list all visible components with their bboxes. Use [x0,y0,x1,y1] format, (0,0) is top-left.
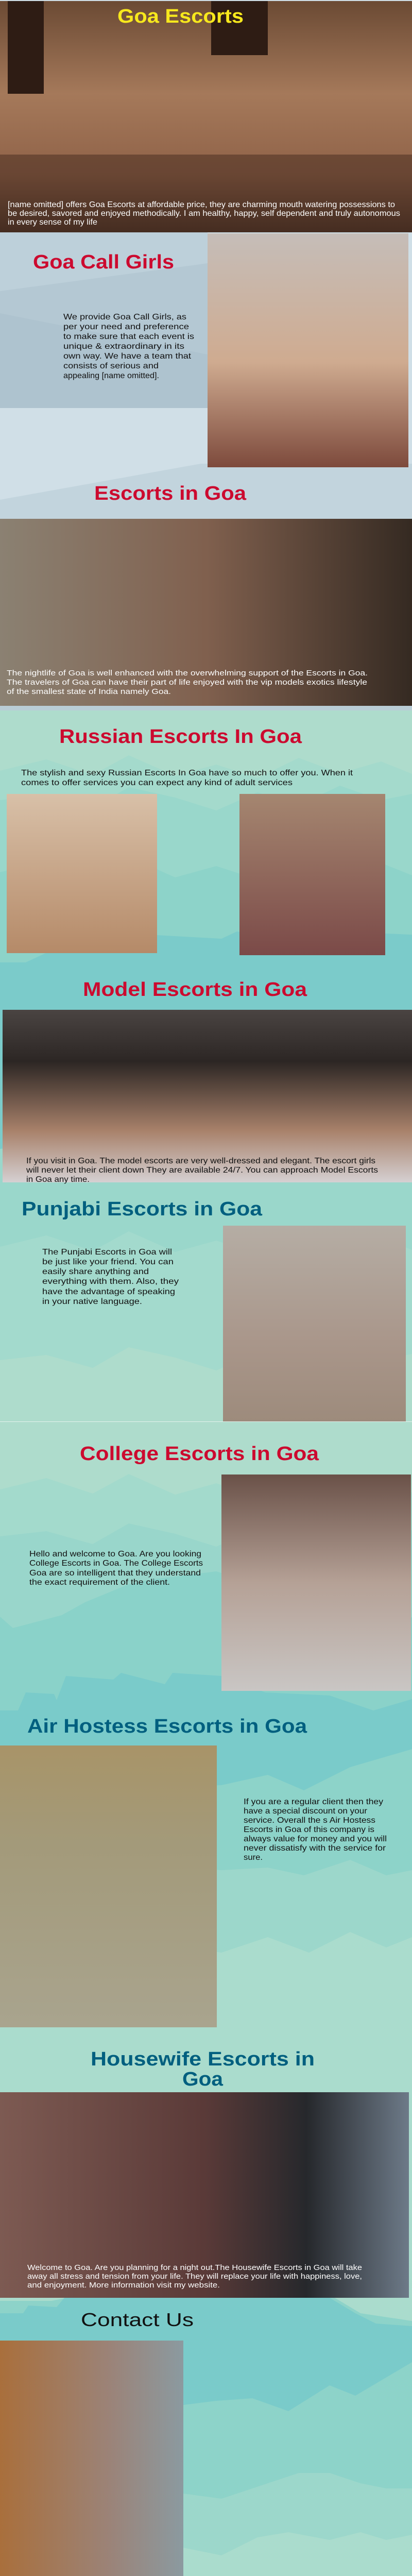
text block: Air Hostess: never dissatisfy with the service for [244,1844,386,1853]
text block: call girls [63,313,194,380]
text block: Punjabi: have the advantage of speaking [42,1287,175,1296]
text block: Punjabi: The Punjabi Escorts in Goa will [42,1248,172,1257]
text block: Air Hostess: always value for money and you will [244,1835,387,1843]
photo placeholder: nightlife [0,519,412,706]
photo placeholder: College [221,1475,411,1691]
photo placeholder: right [239,794,385,955]
text block: College: Hello and welcome to Goa. Are you looking [29,1550,201,1558]
photo placeholder: Air Hostess [0,1745,217,2027]
text block: model: If you visit in Goa. The model escorts are very well-dressed and elegant. The escort girls [26,1157,375,1165]
text block: intro [8,200,400,227]
text block: College: Goa are so intelligent that they understand [29,1569,201,1578]
text block: call girls: to make sure that each event is [63,332,194,341]
text block: call girls: appealing [name omitted]. [63,371,159,380]
panel: Escorts in Goa [0,483,412,710]
text block: intro: be desired, savored and enjoyed methodically. I am healthy, happy, self dependent and truly autonomous [8,209,400,218]
text block: Air Hostess: service. Overall the s Air Hostess [244,1816,375,1825]
heading: Housewife Escorts in Goa: Goa [182,2069,224,2090]
heading: Goa Escorts: Goa Escorts [117,6,244,27]
text block: nightlife: The travelers of Goa can have their part of life enjoyed with the vip models exotics lifestyle [7,678,367,687]
text block: Punjabi [42,1248,179,1306]
panel: Contact Us [0,2309,194,2576]
photo placeholder: Housewife [0,2092,409,2298]
page background: pale blue upper section [0,0,412,711]
text block: Air Hostess: sure. [244,1853,263,1862]
text block: Punjabi: in your native language. [42,1297,142,1306]
text block: College: the exact requirement of the client. [29,1578,170,1587]
panel: Russian Escorts In Goa [7,726,385,955]
heading: Housewife Escorts in Goa [91,2048,315,2090]
heading: Punjabi Escorts in Goa: Punjabi Escorts in Goa [22,1198,263,1220]
text block: Punjabi: everything with them. Also, they [42,1277,179,1286]
text block: nightlife: The nightlife of Goa is well enhanced with the overwhelming support of the Escorts in Goa. [7,669,368,677]
heading: Air Hostess Escorts in Goa: Air Hostess Escorts in Goa [27,1716,307,1737]
text block: Punjabi: be just like your friend. You can [42,1258,174,1266]
panel: Air Hostess Escorts in Goa [0,1716,387,2027]
text block: model [26,1157,378,1184]
photo placeholder: call girls [208,233,408,467]
text block: Housewife: away all stress and tension from your life. They will replace your life with happiness, love, [27,2272,362,2281]
text block: intro: in every sense of my life [8,218,97,227]
text block: nightlife: of the smallest state of India namely Goa. [7,687,171,696]
panel: Punjabi Escorts in Goa [0,1198,412,1422]
text block: call girls: We provide Goa Call Girls, as [63,313,186,321]
text block: call girls: consists of serious and [63,362,159,370]
heading: Contact Us: Contact Us [81,2309,194,2330]
heading: Russian Escorts In Goa: Russian Escorts In Goa [59,726,302,748]
text block: Air Hostess: If you are a regular client then they [244,1798,383,1806]
heading: Escorts in Goa: Escorts in Goa [94,483,247,504]
text panel background [0,232,208,408]
text block: Air Hostess: Escorts in Goa of this company is [244,1825,374,1834]
heading: Goa Call Girls: Goa Call Girls [33,251,174,273]
panel: Housewife Escorts in Goa [0,2048,409,2298]
text block: nightlife [7,669,368,696]
text block: Air Hostess: have a special discount on your [244,1807,368,1816]
heading: College Escorts in Goa: College Escorts in Goa [80,1443,319,1465]
text block: call girls: per your need and preference [63,323,189,331]
heading: Model Escorts in Goa: Model Escorts in Goa [83,979,307,1001]
text block: Housewife [27,2263,362,2290]
text block: call girls: own way. We have a team that [63,352,192,361]
page background: jagged teal bands [0,710,412,2576]
text block: call girls: unique & extraordinary in its [63,342,184,351]
panel: Model Escorts in Goa [3,979,412,1184]
panel: Goa Call Girls [0,232,408,467]
text block: Russian [21,769,353,787]
text block: Russian: comes to offer services you can expect any kind of adult services [21,778,293,787]
photo placeholder: Punjabi [223,1226,406,1421]
text block: College: College Escorts in Goa. The College Escorts [29,1559,203,1568]
text block: College [29,1550,203,1587]
photo placeholder: model [3,1010,412,1182]
heading: Housewife Escorts in Goa: Housewife Escorts in [91,2048,315,2070]
text block: Air Hostess [244,1798,387,1862]
text block: Russian: The stylish and sexy Russian Escorts In Goa have so much to offer you. When it [21,769,353,777]
text block: Punjabi: easily share anything and [42,1267,149,1276]
text block: Housewife: and enjoyment. More information visit my website. [27,2281,220,2290]
panel: College Escorts in Goa [29,1443,411,1691]
photo placeholder: contact [0,2341,183,2576]
photo placeholder: left [7,794,157,953]
text block: model: in Goa any time. [26,1175,90,1184]
divider strip [0,706,412,710]
panel: Goa Escorts [0,1,412,232]
text block: intro: [name omitted] offers Goa Escorts at affordable price, they are charming mouth watering possessions to [8,200,395,209]
text block: model: will never let their client down They are available 24/7. You can approach Model Escorts [26,1166,378,1175]
text block: Housewife: Welcome to Goa. Are you planning for a night out.The Housewife Escorts in Goa will take [27,2263,362,2272]
photo placeholder: hero [0,1,412,232]
